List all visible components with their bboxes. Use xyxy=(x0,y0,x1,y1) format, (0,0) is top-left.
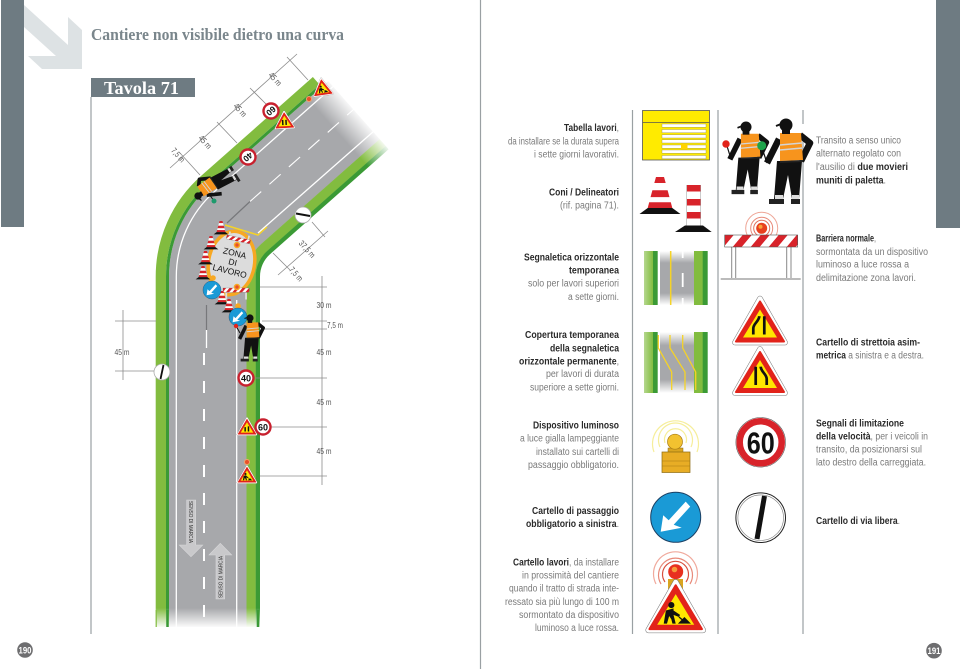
zone label: DI xyxy=(227,256,238,268)
covered centre line xyxy=(206,202,250,330)
text: passaggio obbligatorio: obbligatorio a sinistra. xyxy=(526,519,619,530)
title: Cantiere non visibile dietro una curva xyxy=(91,25,344,44)
column rules xyxy=(91,0,803,669)
icon: mandatory left passage xyxy=(651,492,701,542)
page number 191 xyxy=(926,643,942,658)
text: cartello lavori: quando il tratto di strada inte- xyxy=(509,584,619,594)
sign: 40 straight xyxy=(238,370,254,386)
dimension labels: 30 m xyxy=(316,300,332,310)
text: limitazione velocita: lato destro della carreggiata. xyxy=(816,458,926,468)
text: dispositivo: Dispositivo luminoso xyxy=(533,420,619,432)
dimension labels: 45 m xyxy=(316,446,332,456)
icon: decorative arrow xyxy=(24,5,82,69)
text: cartello lavori: Cartello lavori, da installare xyxy=(513,558,619,568)
icon: left flagger xyxy=(722,121,766,194)
text: dispositivo: a luce gialla lampeggiante xyxy=(520,434,619,444)
sign: works diagonal xyxy=(312,77,333,96)
text: strettoia xyxy=(816,338,924,362)
zone label xyxy=(212,245,248,280)
icon: speed limit 60: 60 xyxy=(747,426,775,460)
icon: barrier with lamp xyxy=(721,212,801,279)
text: passaggio obbligatorio: Cartello di passaggio xyxy=(532,506,619,517)
text: barriera: Barriera normale, xyxy=(816,234,876,244)
sign: narrowing diagonal xyxy=(275,111,294,128)
text: barriera: delimitazione zona lavori. xyxy=(816,273,916,284)
dimension labels: 45 m xyxy=(266,70,284,88)
text: tabella lavori: i sette giorni lavorativi. xyxy=(534,150,619,160)
plan cones xyxy=(196,221,236,312)
text: barriera xyxy=(816,234,928,284)
plan flagger upper xyxy=(188,161,241,207)
text: segnaletica: solo per lavori superiori xyxy=(528,278,619,290)
road end fade top xyxy=(306,77,396,173)
lane markings xyxy=(176,87,373,627)
arrow: direction of travel up xyxy=(209,543,232,599)
text: segnaletica: Segnaletica orizzontale xyxy=(524,252,619,264)
work zone xyxy=(196,221,267,326)
icon: narrowing sign left xyxy=(735,298,785,342)
icon: temporary road marking xyxy=(644,251,708,305)
icon: cone xyxy=(640,177,680,214)
page number 190 xyxy=(17,642,33,658)
road surface xyxy=(208,110,354,627)
text: tabella lavori: Tabella lavori, xyxy=(564,123,619,134)
text: segnaletica: temporanea xyxy=(569,266,619,276)
text: limitazione velocita: Segnali di limitazione xyxy=(816,418,904,430)
text: limitazione velocita: della velocità, per i veicoli in xyxy=(816,432,928,442)
text: transito xyxy=(816,136,908,186)
text: tabella lavori xyxy=(508,123,619,160)
bottom barrier xyxy=(223,288,249,300)
text: coni xyxy=(549,188,619,212)
arrow: direction of travel up: SENSO DI MARCIA xyxy=(218,556,224,598)
dimension labels: 45 m xyxy=(231,101,249,119)
dimension labels: 45 m xyxy=(196,133,214,151)
page number 191: 191 xyxy=(928,646,940,656)
dimension labels xyxy=(114,70,343,456)
dimension labels: 45 m xyxy=(114,347,130,357)
right sidebar xyxy=(936,0,960,228)
text: copertura xyxy=(519,330,619,394)
lamp straight xyxy=(244,460,250,464)
sign: works straight xyxy=(238,466,256,483)
top barrier xyxy=(226,231,251,244)
sign: 40 diagonal: 40 xyxy=(241,150,255,164)
arrow: direction of travel down: SENSO DI MARCIA xyxy=(187,501,193,543)
text: copertura: superiore a sette giorni. xyxy=(530,382,619,394)
road plan xyxy=(150,77,396,628)
text: copertura: per lavori di durata xyxy=(546,369,619,380)
icon: right flagger xyxy=(757,118,810,204)
sign: end of limits diagonal xyxy=(295,207,311,223)
text: segnaletica xyxy=(524,252,619,303)
dimension labels: 45 m xyxy=(316,397,332,407)
icon: end of restrictions xyxy=(736,493,786,542)
right verge xyxy=(251,143,387,627)
text: dispositivo: installato sui cartelli di xyxy=(536,447,619,458)
text: copertura: orizzontale permanente, xyxy=(519,356,619,368)
dimension labels: 7,5 m xyxy=(287,265,305,283)
left sidebar xyxy=(1,0,24,227)
text: transito: alternato regolato con xyxy=(816,148,901,160)
text: via libera: Cartello di via libera. xyxy=(816,516,900,527)
text: barriera: sormontata da un dispositivo xyxy=(816,247,928,258)
plan blue signs xyxy=(203,281,247,326)
text: cartello lavori xyxy=(505,558,619,634)
lamp diagonal xyxy=(306,96,312,102)
dimension labels: 7,5 m xyxy=(169,146,187,164)
text: transito: muniti di paletta. xyxy=(816,176,886,186)
text: tabella lavori: da installare se la durata supera xyxy=(508,136,619,148)
sign: 60 straight xyxy=(256,420,270,434)
dimension labels: 45 m xyxy=(316,347,332,357)
sign: 40 straight: 40 xyxy=(241,374,251,384)
text: copertura: Copertura temporanea xyxy=(525,330,619,341)
dimension labels: 37,5 m xyxy=(297,238,318,260)
text: cartello lavori: in prossimità del cantiere xyxy=(522,570,619,582)
text: coni: (rif. pagina 71). xyxy=(560,200,619,212)
text: strettoia: Cartello di strettoia asim- xyxy=(816,338,920,348)
text: copertura: della segnaletica xyxy=(550,344,619,354)
text: transito: l'ausilio di due movieri xyxy=(816,162,908,173)
icon: narrowing sign right xyxy=(735,349,785,393)
arrow: direction of travel down xyxy=(179,500,203,557)
road end fade bottom xyxy=(150,608,265,628)
plan flagger lower xyxy=(234,314,263,361)
text: cartello lavori: ressato sia più lungo di 100 m xyxy=(505,597,619,608)
sign: narrowing straight xyxy=(238,418,256,435)
heading: Tavola 71: Tavola 71 xyxy=(104,78,179,98)
zone label: LAVORO xyxy=(212,262,248,280)
text: cartello lavori: sormontato da dispositivo xyxy=(519,610,619,621)
dimension labels: 7,5 m xyxy=(327,320,343,330)
zone label: ZONA xyxy=(222,245,248,261)
text: passaggio obbligatorio xyxy=(526,506,619,530)
icon: yellow flashing lamp xyxy=(652,421,699,472)
text: transito: Transito a senso unico xyxy=(816,136,901,146)
icon: covered road marking xyxy=(644,332,708,393)
icon: speed limit 60 xyxy=(736,418,786,467)
page number 190: 190 xyxy=(18,646,32,656)
text: dispositivo: passaggio obbligatorio. xyxy=(528,460,619,471)
icon: works sign with red lamp xyxy=(648,552,703,630)
icon: delineator xyxy=(675,185,712,232)
text: strettoia: metrica a sinistra e a destra. xyxy=(816,350,924,362)
zone lens xyxy=(203,227,260,299)
sign: 60 diagonal: 60 xyxy=(264,104,278,118)
sign: end of limits straight xyxy=(154,364,170,380)
left verge xyxy=(161,81,321,627)
dimension lines xyxy=(115,54,328,485)
text: segnaletica: a sette giorni. xyxy=(568,292,619,303)
icon: tabella lavori xyxy=(642,110,710,160)
text: cartello lavori: luminoso a luce rossa. xyxy=(535,623,619,634)
text: barriera: luminoso a luce rossa a xyxy=(816,260,909,270)
text: limitazione velocita xyxy=(816,418,928,468)
text: limitazione velocita: transito, da posizionarsi sul xyxy=(816,444,922,456)
yellow closure lines xyxy=(213,225,267,312)
zone lamps xyxy=(234,242,240,290)
text: coni: Coni / Delineatori xyxy=(549,188,619,198)
sign: 60 straight: 60 xyxy=(258,422,268,432)
text: dispositivo xyxy=(520,420,619,471)
